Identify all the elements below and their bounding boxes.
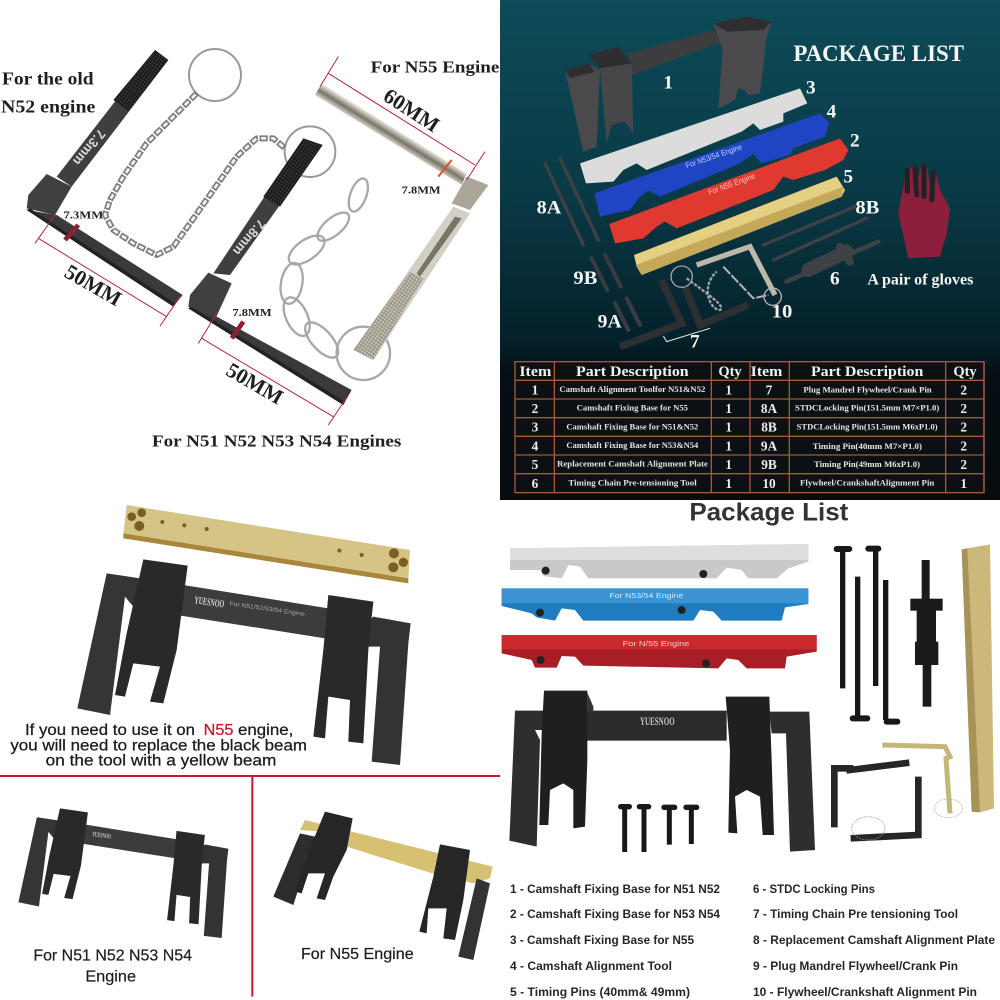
text: N55 replacement note	[10, 722, 307, 770]
part 10: alignment pin and chain	[671, 247, 781, 310]
part numbers: 4	[827, 101, 837, 122]
chain: black pin chain and rings	[105, 49, 335, 255]
part: blue base: For N53/54 Engine	[609, 591, 683, 600]
label: old N52	[1, 68, 95, 117]
part numbers: 9A	[598, 311, 622, 332]
table item and quantity values: 9B	[761, 457, 777, 472]
part 5: gold plate	[634, 177, 845, 275]
part 7: mandrel pins	[620, 280, 748, 347]
part numbers: 8B	[855, 197, 879, 218]
label: dimensions	[60, 83, 444, 409]
table descriptions: Camshaft Fixing Base for N53&N54	[566, 441, 699, 450]
part numbers: 3	[806, 77, 816, 98]
part: alignment pin	[852, 745, 962, 840]
part: tensioning tool	[910, 560, 943, 707]
part numbers: 1	[663, 72, 673, 93]
title: package list: Package List	[689, 499, 849, 527]
parts 9A and 9B: timing pins	[592, 255, 640, 330]
text: N55 replacement note: If you need to use it on	[25, 722, 195, 739]
table item and quantity values: 7	[766, 382, 773, 397]
table descriptions: Replacement Camshaft Alignment Plate	[557, 460, 708, 469]
part: long pins	[837, 549, 897, 722]
table item and quantity values: 1	[725, 476, 732, 491]
table descriptions: Timing Pin(40mm M7×P1.0)	[813, 442, 922, 451]
icon: yellow beam	[123, 505, 410, 583]
table item and quantity values: 4	[532, 438, 539, 453]
caption: N51 to N54: Engine	[85, 968, 136, 985]
part 2: red base	[609, 138, 848, 243]
part 3: silver base	[580, 88, 807, 183]
table descriptions: Camshaft Fixing Base for N51&N52	[566, 422, 698, 431]
caption: N51 to N54: For N51 N52 N53 N54	[33, 948, 192, 965]
table descriptions: Flywheel/CrankshaftAlignment Pin	[800, 479, 935, 488]
table item and quantity values: 5	[532, 457, 539, 472]
part numbers: 7	[690, 331, 700, 352]
parts photo and labels	[537, 17, 973, 352]
table item and quantity values: 2	[960, 438, 967, 453]
part 6: tensioning tool	[787, 242, 878, 282]
panel: white package list	[502, 499, 994, 852]
title: package list: PACKAGE LIST	[793, 41, 964, 67]
table descriptions: STDCLocking Pin(151.5mm M7×P1.0)	[795, 404, 940, 413]
part numbers	[537, 72, 879, 352]
part numbers: 6	[830, 268, 840, 289]
part numbers: 2	[850, 131, 860, 152]
list: left column parts: 1 - Camshaft Fixing Base for N51 N52	[510, 882, 720, 896]
list: left column parts: 5 - Timing Pins (40mm& 49mm)	[510, 985, 690, 999]
table item and quantity values: 2	[960, 457, 967, 472]
table header: Qty	[718, 364, 742, 380]
table header	[519, 364, 977, 380]
part: mandrel pins	[834, 763, 918, 838]
table descriptions: Camshaft Alignment Toolfor N51&N52	[559, 385, 705, 394]
table item and quantity values: 2	[960, 382, 967, 397]
icon: 7.8mm pin	[188, 138, 352, 405]
panel: beam replacement	[0, 505, 500, 997]
table descriptions: Timing Chain Pre-tensioning Tool	[568, 479, 697, 488]
list: left column parts: 2 - Camshaft Fixing Base for N53 N54	[510, 907, 720, 921]
part: red base	[502, 635, 817, 668]
table item and quantity values: 2	[960, 420, 967, 435]
label: N51 to N54 engines: For N51 N52 N53 N54 Engines	[152, 432, 402, 451]
table header: Qty	[953, 364, 977, 380]
part: black alignment tool	[509, 691, 815, 852]
list: right column parts: 10 - Flywheel/Crankshaft Alignment Pin	[753, 985, 977, 999]
label: N55 engine: For N55 Engine	[371, 57, 500, 76]
list: right column parts: 9 - Plug Mandrel Flywheel/Crank Pin	[753, 959, 958, 973]
table: parts list	[515, 362, 984, 493]
table item and quantity values: 2	[960, 401, 967, 416]
part: blue base	[502, 588, 808, 621]
list: right column parts: 8 - Replacement Camshaft Alignment Plate	[753, 933, 995, 947]
list: left column parts: 3 - Camshaft Fixing Base for N55	[510, 933, 694, 947]
table item and quantity values: 6	[532, 476, 539, 491]
caption: N55: For N55 Engine	[301, 946, 414, 963]
list: left column parts: 4 - Camshaft Alignment Tool	[510, 959, 672, 973]
label: dimensions: 7.8MM	[232, 307, 272, 319]
table header: Part Description	[576, 364, 689, 380]
table item and quantity values: 9A	[761, 438, 778, 453]
panel: dark package list	[500, 0, 1000, 500]
table item and quantity values: 1	[725, 438, 732, 453]
part numbers: 8A	[537, 197, 561, 218]
chain: silver oval links	[278, 176, 390, 380]
icon: 7.8mm pin: 7.8mm	[230, 216, 269, 259]
icon: tool with black beam: YUESNOO	[92, 831, 111, 841]
icon: 7.3mm pin	[27, 50, 183, 307]
table item and quantity values	[532, 382, 967, 491]
table item and quantity values: 1	[725, 382, 732, 397]
list: right column parts: 6 - STDC Locking Pins	[753, 882, 875, 896]
icon: 7.3mm pin: 7.3mm	[70, 126, 109, 169]
label: old N52: N52 engine	[1, 97, 95, 117]
dividers	[0, 776, 500, 997]
part: gold plate	[962, 544, 994, 812]
part 4: blue base	[594, 113, 829, 217]
icon: black alignment tool: For N51/52/53/54 Engine	[229, 601, 306, 618]
text: N55 replacement note: engine,	[238, 722, 293, 739]
text: N55 replacement note: N55	[204, 722, 233, 739]
part numbers: 9B	[573, 268, 597, 289]
label: dimensions: 60MM	[379, 83, 444, 137]
table item and quantity values: 10	[762, 476, 776, 491]
table item and quantity values: 1	[725, 457, 732, 472]
label: dimensions: 7.8MM	[402, 184, 441, 196]
table descriptions	[557, 385, 940, 488]
parts 8A and 8B: locking pins	[545, 158, 867, 260]
table descriptions: Camshaft Fixing Base for N55	[577, 404, 688, 413]
part 1: alignment tool	[565, 17, 772, 152]
text: N55 replacement note: on the tool with a yellow beam	[46, 753, 276, 770]
part numbers: 10	[772, 301, 792, 322]
part numbers: 5	[843, 166, 853, 187]
text: N55 replacement note: you will need to replace the black beam	[10, 737, 307, 754]
table header: Item	[751, 364, 782, 380]
icon: silver N55 pin	[315, 83, 488, 360]
part: red base: For N/55 Engine	[623, 639, 689, 648]
table item and quantity values: 3	[532, 420, 539, 435]
icon: black alignment tool: YUESNOO	[194, 595, 225, 610]
label: dimensions: 7.3MM	[63, 209, 104, 221]
icon: gloves	[898, 165, 950, 258]
label: dimensions: 50MM	[222, 358, 288, 409]
label: dimensions: 50MM	[60, 259, 126, 311]
part: short pins	[621, 807, 697, 852]
part: black alignment tool: YUESNOO	[640, 714, 675, 728]
caption: N51 to N54	[33, 948, 192, 985]
table descriptions: STDCLocking Pin(151.5mm M6xP1.0)	[797, 422, 938, 431]
table descriptions: Plug Mandrel Flywheel/Crank Pin	[803, 385, 932, 394]
table descriptions: Timing Pin(49mm M6xP1.0)	[814, 460, 920, 469]
table item and quantity values: 2	[532, 401, 539, 416]
part 4: blue base: For N53/54 Engine	[684, 142, 744, 170]
list: left column parts	[510, 882, 720, 999]
table header: Part Description	[811, 364, 923, 380]
part 2: red base: For N55 Engine	[707, 171, 757, 197]
label: gloves: A pair of gloves	[867, 271, 973, 288]
table item and quantity values: 1	[960, 476, 967, 491]
table item and quantity values: 8A	[761, 401, 778, 416]
table item and quantity values: 1	[532, 382, 538, 397]
panel: pin dimensions	[1, 49, 500, 451]
table item and quantity values: 8B	[761, 420, 777, 435]
list: right column parts: 7 - Timing Chain Pre tensioning Tool	[753, 907, 958, 921]
table item and quantity values: 1	[725, 401, 732, 416]
table item and quantity values: 1	[725, 420, 732, 435]
part: silver base	[510, 544, 808, 578]
dimension lines	[35, 57, 485, 425]
table header: Item	[519, 364, 551, 380]
label: old N52: For the old	[2, 68, 94, 88]
icon: tool with black beam	[18, 808, 228, 938]
icon: black alignment tool	[77, 559, 411, 765]
list: right column parts	[753, 882, 995, 999]
icon: tool with yellow beam	[273, 812, 493, 960]
